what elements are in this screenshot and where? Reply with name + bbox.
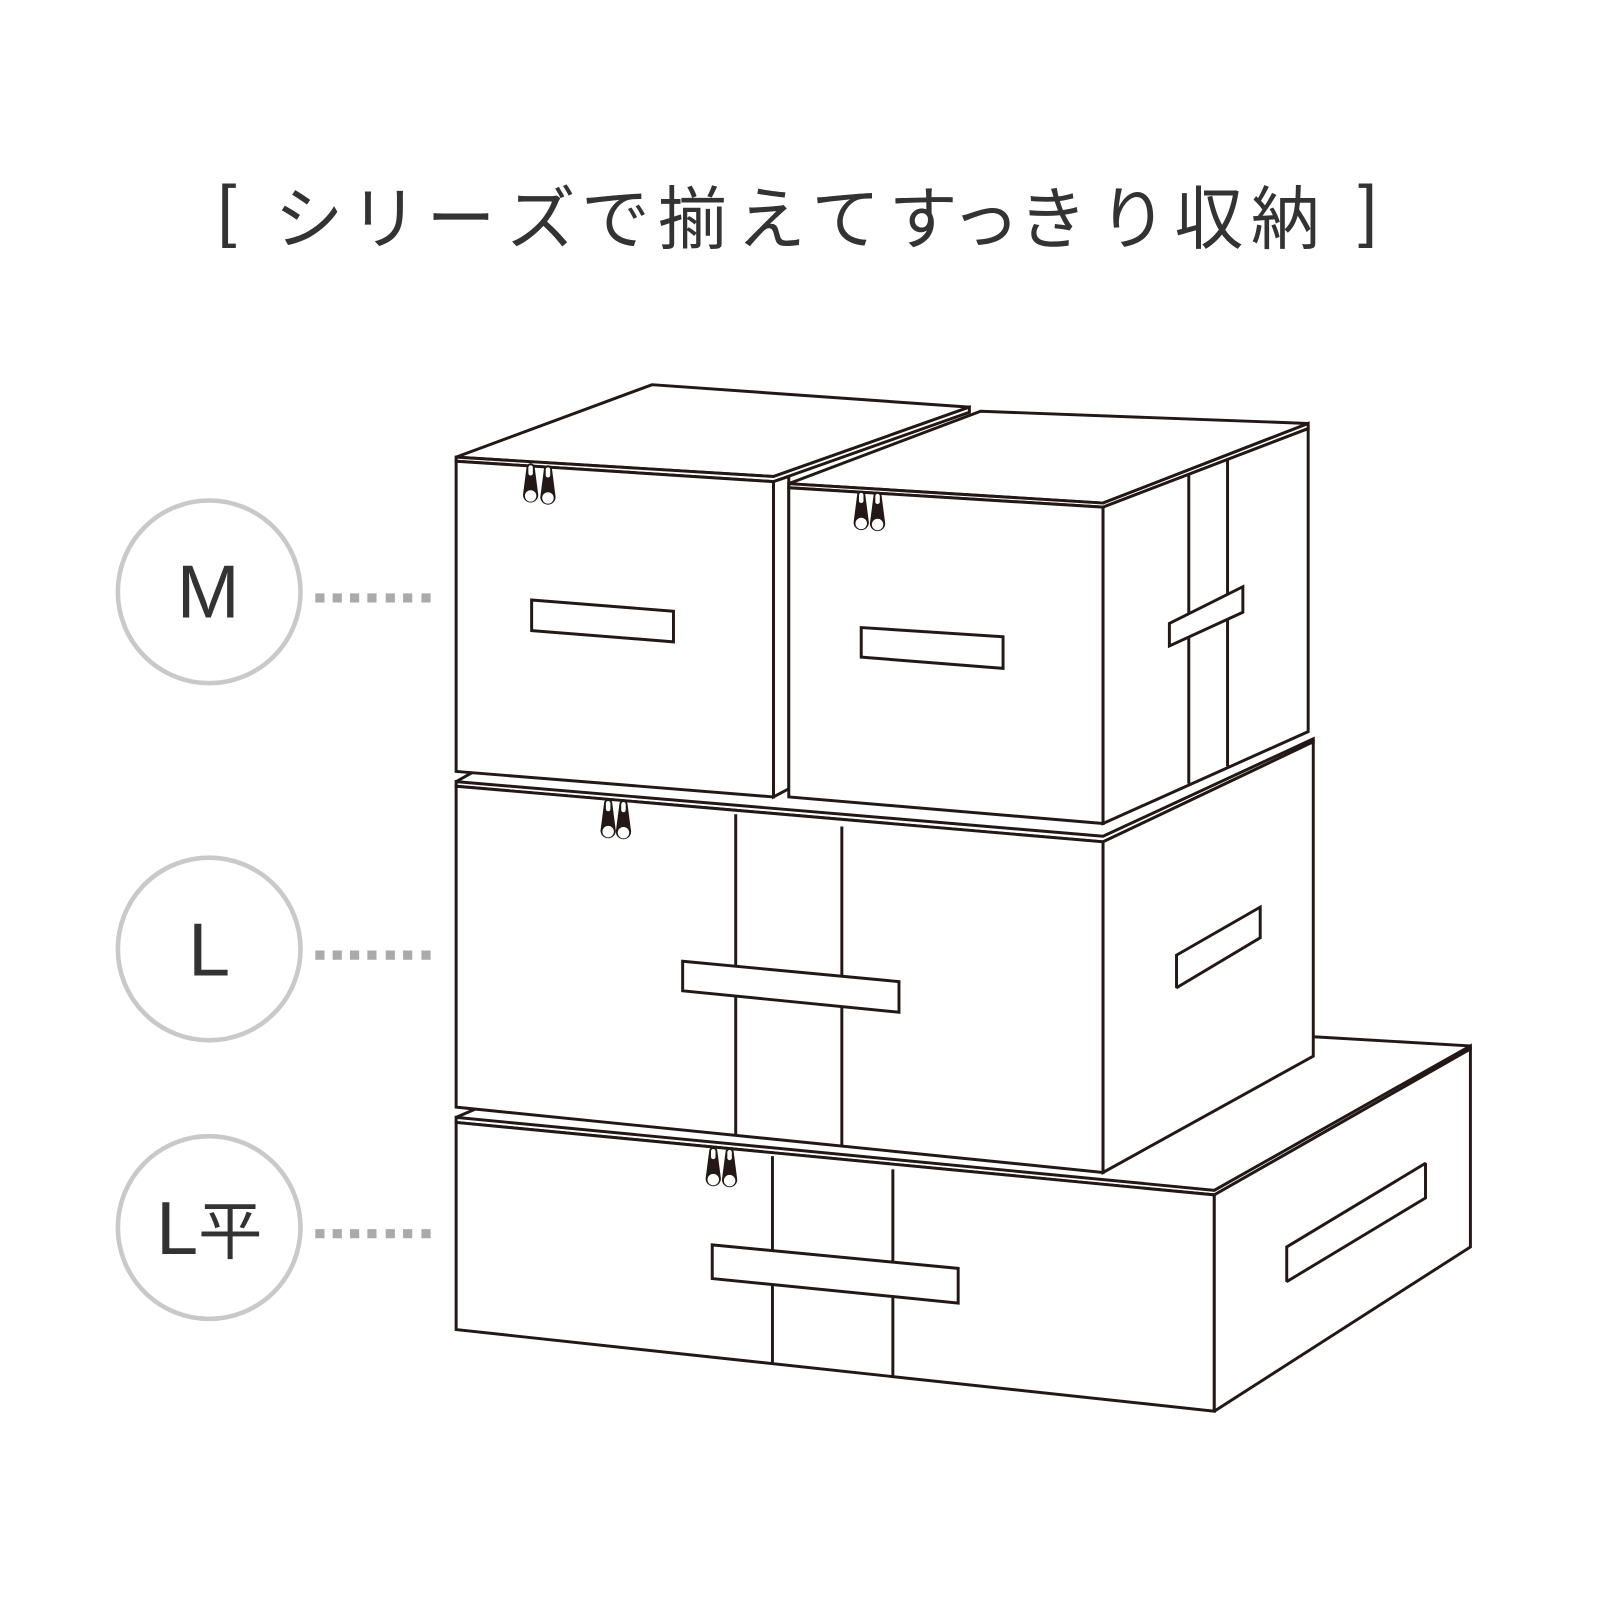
title: ] [1358, 173, 1377, 249]
L flat top back edges [456, 1037, 1470, 1117]
M left front handle [532, 600, 673, 642]
size label: M: M [177, 550, 240, 634]
M left zipper pulls [523, 463, 556, 505]
L flat side handle [1287, 1163, 1426, 1282]
size label: M [118, 501, 431, 683]
L side handle [1177, 907, 1260, 988]
L front straps [736, 814, 842, 1146]
L flat front face [456, 1122, 1214, 1411]
M right side face [1103, 429, 1308, 823]
title: [ [217, 173, 236, 249]
M left side sliver [773, 477, 789, 797]
L front handle [683, 961, 899, 1012]
M right lid band [789, 423, 1308, 507]
M right zipper pulls [854, 491, 885, 531]
box: M left (top) [456, 385, 969, 797]
size label: L flat [118, 1136, 431, 1319]
M right front handle [861, 628, 1003, 668]
M right side straps [1189, 460, 1228, 784]
box: L (middle) [456, 739, 1313, 1172]
L side face [1103, 742, 1313, 1172]
size label: L [118, 858, 431, 1040]
M left top face [456, 385, 969, 477]
L flat side face [1214, 1049, 1470, 1411]
L lid band [456, 739, 1313, 842]
L flat front straps [772, 1156, 893, 1378]
L front face [456, 786, 1103, 1172]
L top left edge [456, 772, 472, 782]
title: シリーズで揃えてすっきり収納 [274, 163, 1320, 263]
M right side handle [1169, 587, 1243, 646]
L flat zipper pulls [706, 1147, 737, 1187]
M right front face [789, 488, 1103, 823]
box: M right (top) [789, 411, 1308, 823]
size label: L: L [188, 909, 230, 993]
M left front face [456, 461, 773, 797]
box: L flat (bottom) [456, 1037, 1470, 1411]
L flat lid band [456, 1046, 1470, 1195]
L zipper pulls [601, 799, 631, 839]
size label: L flat: L平 [156, 1179, 262, 1273]
M right top face [789, 411, 1308, 503]
L flat front handle [712, 1245, 958, 1303]
M left lid band [456, 407, 969, 482]
